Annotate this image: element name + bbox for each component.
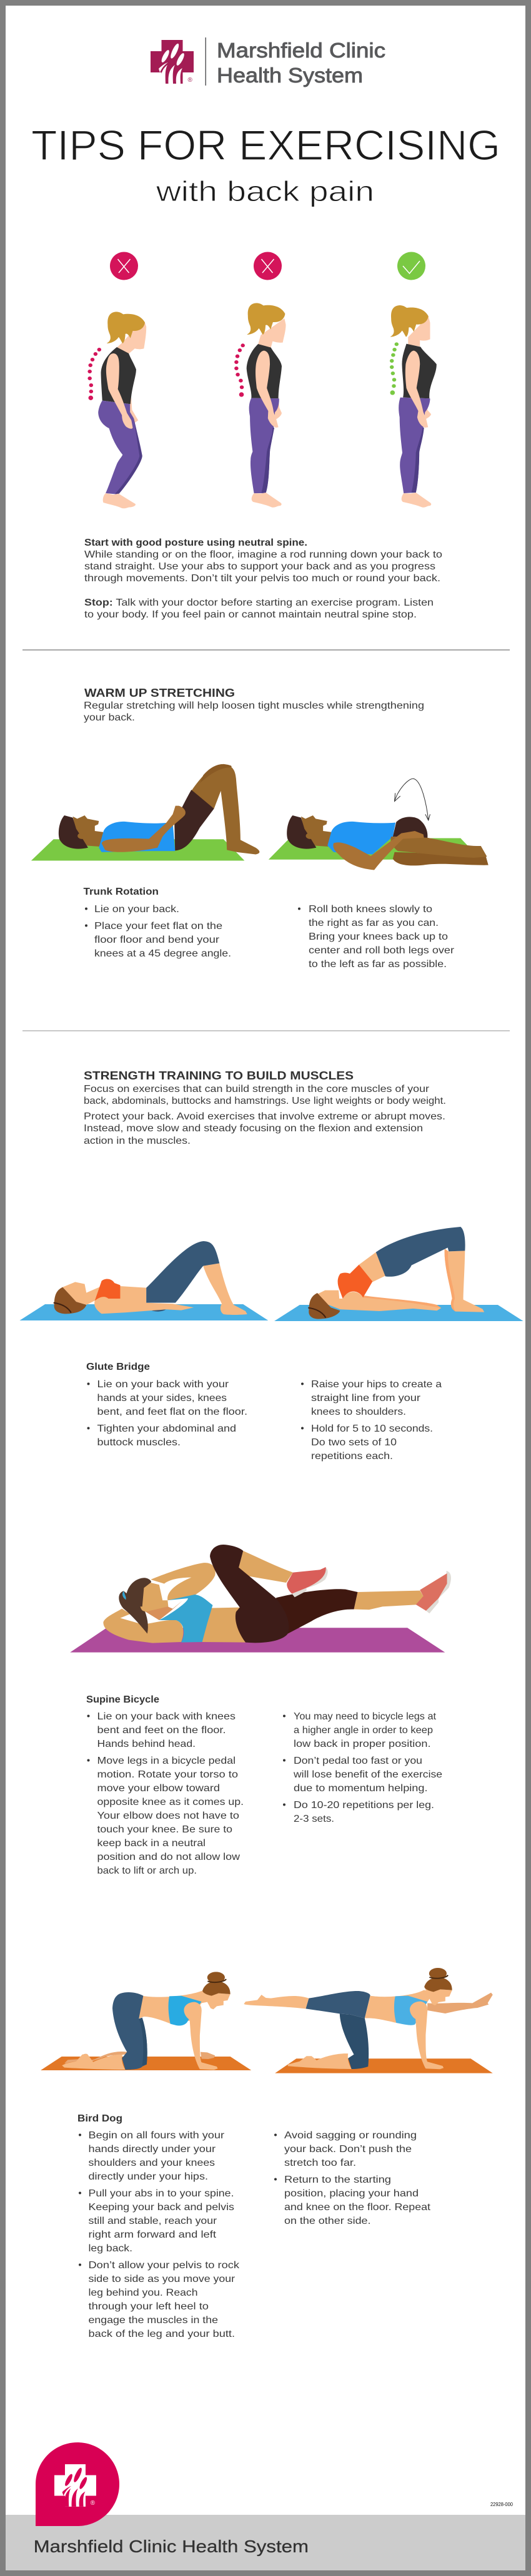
bullets: bird dog left: hands directly under your bbox=[89, 2144, 216, 2155]
bullets: glute bridge left: Tighten your abdominal and bbox=[97, 1423, 236, 1434]
icon: footer teardrop logo bbox=[36, 2442, 119, 2526]
strength training intro text bbox=[84, 1084, 446, 1146]
text block: glute bridge: Glute Bridge bbox=[86, 1362, 150, 1372]
text block: neutral spine advice: stand straight. Use your abs to support your back and as you progress bbox=[84, 561, 435, 572]
bullets: glute bridge left: buttock muscles. bbox=[97, 1437, 181, 1448]
bullets: trunk rotation left bbox=[85, 904, 231, 959]
bullets: bird dog right: position, placing your hand bbox=[284, 2188, 419, 2199]
bullets: supine bicycle right bbox=[283, 1711, 442, 1824]
figure: neutral spine posture bbox=[390, 305, 437, 508]
text block: neutral spine advice: Start with good posture using neutral spine. bbox=[84, 538, 307, 548]
registered mark (footer): ® bbox=[91, 2500, 95, 2507]
bullets: bird dog left: right arm forward and left bbox=[89, 2229, 217, 2240]
bullets: trunk rotation right bbox=[298, 904, 455, 970]
bullets: supine bicycle left: opposite knee as it comes up. bbox=[97, 1797, 244, 1807]
text block: neutral spine advice bbox=[84, 538, 442, 584]
bullets: glute bridge right: repetitions each. bbox=[311, 1451, 393, 1462]
bullets: trunk rotation left: knees at a 45 degree angle. bbox=[94, 948, 231, 959]
bullets: bird dog right bbox=[274, 2130, 431, 2226]
icon: incorrect marker 1 bbox=[110, 252, 138, 280]
logo wordmark: Health System bbox=[217, 64, 363, 87]
bullets: bird dog left: back of the leg and your butt. bbox=[89, 2329, 235, 2339]
bullets: glute bridge right: straight line from your bbox=[311, 1393, 421, 1404]
bullets: supine bicycle right: will lose benefit of the exercise bbox=[293, 1769, 442, 1780]
bullets: bird dog left: still and stable, reach your bbox=[89, 2216, 217, 2226]
title: TIPS FOR EXERCISING bbox=[31, 122, 500, 169]
bullets: bird dog left: side to side as you move your bbox=[89, 2274, 236, 2284]
bullets: glute bridge left: Lie on your back with your bbox=[97, 1379, 229, 1390]
bullets: glute bridge right: knees to shoulders. bbox=[311, 1407, 406, 1417]
text block: stop advice: to your body. If you feel pain or cannot maintain neutral spine stop. bbox=[84, 609, 417, 620]
bullets: glute bridge right: Raise your hips to create a bbox=[311, 1379, 442, 1390]
bullets: supine bicycle left: Hands behind head. bbox=[97, 1739, 196, 1749]
bullets: bird dog right: stretch too far. bbox=[284, 2158, 356, 2168]
bullets: glute bridge right: Do two sets of 10 bbox=[311, 1437, 397, 1448]
warm up intro text: Regular stretching will help loosen tight muscles while strengthening bbox=[84, 701, 424, 711]
arrow: knee roll direction bbox=[395, 779, 430, 820]
footer organisation name: Marshfield Clinic Health System bbox=[34, 2537, 309, 2556]
bullets: supine bicycle right: low back in proper position. bbox=[294, 1739, 431, 1749]
text block: bird dog bbox=[77, 2113, 431, 2339]
bullets: bird dog right: on the other side. bbox=[284, 2216, 371, 2226]
illustration: supine bicycle bbox=[70, 1545, 451, 1653]
bullets: supine bicycle left bbox=[87, 1711, 244, 1876]
bullets: bird dog left: leg back. bbox=[89, 2243, 132, 2254]
bullets: glute bridge left: bent, and feet flat on the floor. bbox=[97, 1407, 247, 1417]
bullets: glute bridge left: hands at your sides, knees bbox=[97, 1393, 227, 1404]
text block: glute bridge bbox=[86, 1362, 442, 1462]
bullets: supine bicycle right: 2-3 sets. bbox=[294, 1814, 334, 1824]
bullets: supine bicycle right: due to momentum helping. bbox=[294, 1783, 427, 1794]
text block: trunk rotation: Trunk Rotation bbox=[84, 887, 159, 897]
illustration: trunk rotation start bbox=[31, 764, 259, 861]
bullets: supine bicycle left: Lie on your back with knees bbox=[97, 1711, 236, 1722]
strength training intro text: action in the muscles. bbox=[84, 1136, 191, 1146]
bullets: supine bicycle left: keep back in a neutral bbox=[97, 1838, 206, 1849]
strength training intro text: back, abdominals, buttocks and hamstrings. Use light weights or body weight. bbox=[84, 1096, 446, 1106]
bullets: bird dog left: Don’t allow your pelvis to rock bbox=[89, 2260, 240, 2271]
bullets: bird dog left: Begin on all fours with your bbox=[89, 2130, 225, 2141]
bullets: supine bicycle left: back to lift or arch up. bbox=[97, 1866, 197, 1876]
bullets: trunk rotation left: Place your feet flat on the bbox=[94, 921, 222, 932]
text block: trunk rotation bbox=[84, 887, 455, 970]
bullets: glute bridge left bbox=[87, 1379, 247, 1448]
bullets: supine bicycle left: move your elbow toward bbox=[97, 1783, 220, 1794]
bullets: trunk rotation right: to the left as far as possible. bbox=[309, 959, 447, 970]
illustration: trunk rotation twist bbox=[269, 779, 489, 870]
illustration: glute bridge start bbox=[19, 1241, 268, 1320]
panel: posture comparison figures bbox=[87, 252, 437, 508]
logo divider bbox=[205, 37, 206, 86]
bullets: bird dog right: Return to the starting bbox=[284, 2175, 391, 2185]
strength training intro text: Instead, move slow and steady focusing on the flexion and extension bbox=[84, 1123, 423, 1134]
logo wordmark: Marshfield Clinic bbox=[217, 39, 385, 62]
text block: supine bicycle bbox=[86, 1694, 442, 1876]
bullets: supine bicycle left: bent and feet on the floor. bbox=[97, 1725, 226, 1736]
bullets: trunk rotation right: Roll both knees slowly to bbox=[309, 904, 432, 915]
bullets: supine bicycle right: You may need to bicycle legs at bbox=[294, 1711, 437, 1722]
bullets: supine bicycle left: Your elbow does not have to bbox=[97, 1811, 239, 1821]
strength training intro text: Protect your back. Avoid exercises that involve extreme or abrupt moves. bbox=[84, 1111, 445, 1122]
text block: stop advice: Stop: Talk with your doctor before starting an exercise program. Listen bbox=[84, 597, 434, 608]
bullets: bird dog left: through your left heel to bbox=[89, 2301, 209, 2312]
heading: strength training: STRENGTH TRAINING TO BUILD MUSCLES bbox=[84, 1069, 354, 1082]
bullets: supine bicycle right: Do 10-20 repetitions per leg. bbox=[294, 1800, 434, 1811]
bullets: bird dog left: Keeping your back and pelvis bbox=[89, 2202, 234, 2213]
bullets: bird dog left: Pull your abs in to your spine. bbox=[89, 2188, 234, 2199]
bullets: supine bicycle right: Don’t pedal too fast or you bbox=[294, 1756, 422, 1766]
registered mark: ® bbox=[187, 77, 192, 84]
bullets: trunk rotation left: floor floor and bend your bbox=[94, 935, 220, 945]
logo wordmark bbox=[217, 39, 385, 87]
header logo bbox=[151, 37, 385, 87]
figure: hunched posture bbox=[87, 312, 146, 508]
bullets: bird dog left: leg behind you. Reach bbox=[89, 2288, 197, 2298]
bullets: supine bicycle left: motion. Rotate your torso to bbox=[97, 1769, 238, 1780]
bullets: bird dog left: engage the muscles in the bbox=[89, 2315, 218, 2326]
icon: correct marker bbox=[397, 252, 425, 280]
bullets: bird dog right: your back. Don’t push the bbox=[284, 2144, 412, 2155]
strength training intro text: Focus on exercises that can build strength in the core muscles of your bbox=[84, 1084, 430, 1094]
bullets: supine bicycle left: Move legs in a bicycle pedal bbox=[97, 1756, 236, 1766]
text block: bird dog: Bird Dog bbox=[77, 2113, 122, 2124]
warm up intro text: your back. bbox=[84, 712, 135, 723]
bullets: trunk rotation right: Bring your knees back up to bbox=[309, 932, 448, 942]
bullets: glute bridge right: Hold for 5 to 10 seconds. bbox=[311, 1423, 433, 1434]
subtitle: with back pain bbox=[156, 175, 374, 207]
text block: neutral spine advice: While standing or on the floor, imagine a rod running down your back to bbox=[84, 549, 442, 560]
footer band bbox=[6, 2515, 525, 2570]
heading: strength training bbox=[84, 1069, 446, 1146]
bullets: bird dog left: directly under your hips. bbox=[89, 2171, 208, 2182]
text block: neutral spine advice: through movements. Don’t tilt your pelvis too much or round your back. bbox=[84, 573, 440, 584]
illustration: bird dog extended bbox=[244, 1968, 493, 2073]
document code: 22928-000 bbox=[490, 2502, 514, 2507]
heading: warm up stretching bbox=[84, 687, 424, 723]
bullets: bird dog left: shoulders and your knees bbox=[89, 2158, 215, 2168]
illustration: glute bridge raised bbox=[274, 1227, 524, 1321]
text block: stop advice bbox=[84, 597, 434, 620]
bullets: supine bicycle left: position and do not allow low bbox=[97, 1852, 240, 1862]
bullets: bird dog right: and knee on the floor. Repeat bbox=[284, 2202, 431, 2213]
bullets: trunk rotation left: Lie on your back. bbox=[94, 904, 179, 915]
bullets: glute bridge right bbox=[301, 1379, 442, 1462]
bullets: bird dog left bbox=[79, 2130, 240, 2339]
bullets: supine bicycle left: touch your knee. Be sure to bbox=[97, 1824, 232, 1835]
heading: warm up stretching: WARM UP STRETCHING bbox=[84, 687, 235, 699]
bullets: trunk rotation right: center and roll both legs over bbox=[309, 945, 455, 956]
bullets: trunk rotation right: the right as far as you can. bbox=[309, 918, 439, 928]
icon: incorrect marker 2 bbox=[254, 252, 282, 280]
bullets: bird dog right: Avoid sagging or rounding bbox=[284, 2130, 417, 2141]
illustration: bird dog start bbox=[41, 1972, 251, 2070]
text block: supine bicycle: Supine Bicycle bbox=[86, 1694, 159, 1705]
bullets: supine bicycle right: a higher angle in order to keep bbox=[294, 1725, 433, 1736]
warm up intro text bbox=[84, 701, 424, 723]
figure: swayback posture bbox=[234, 303, 286, 508]
icon: cross with cattails bbox=[151, 40, 194, 84]
